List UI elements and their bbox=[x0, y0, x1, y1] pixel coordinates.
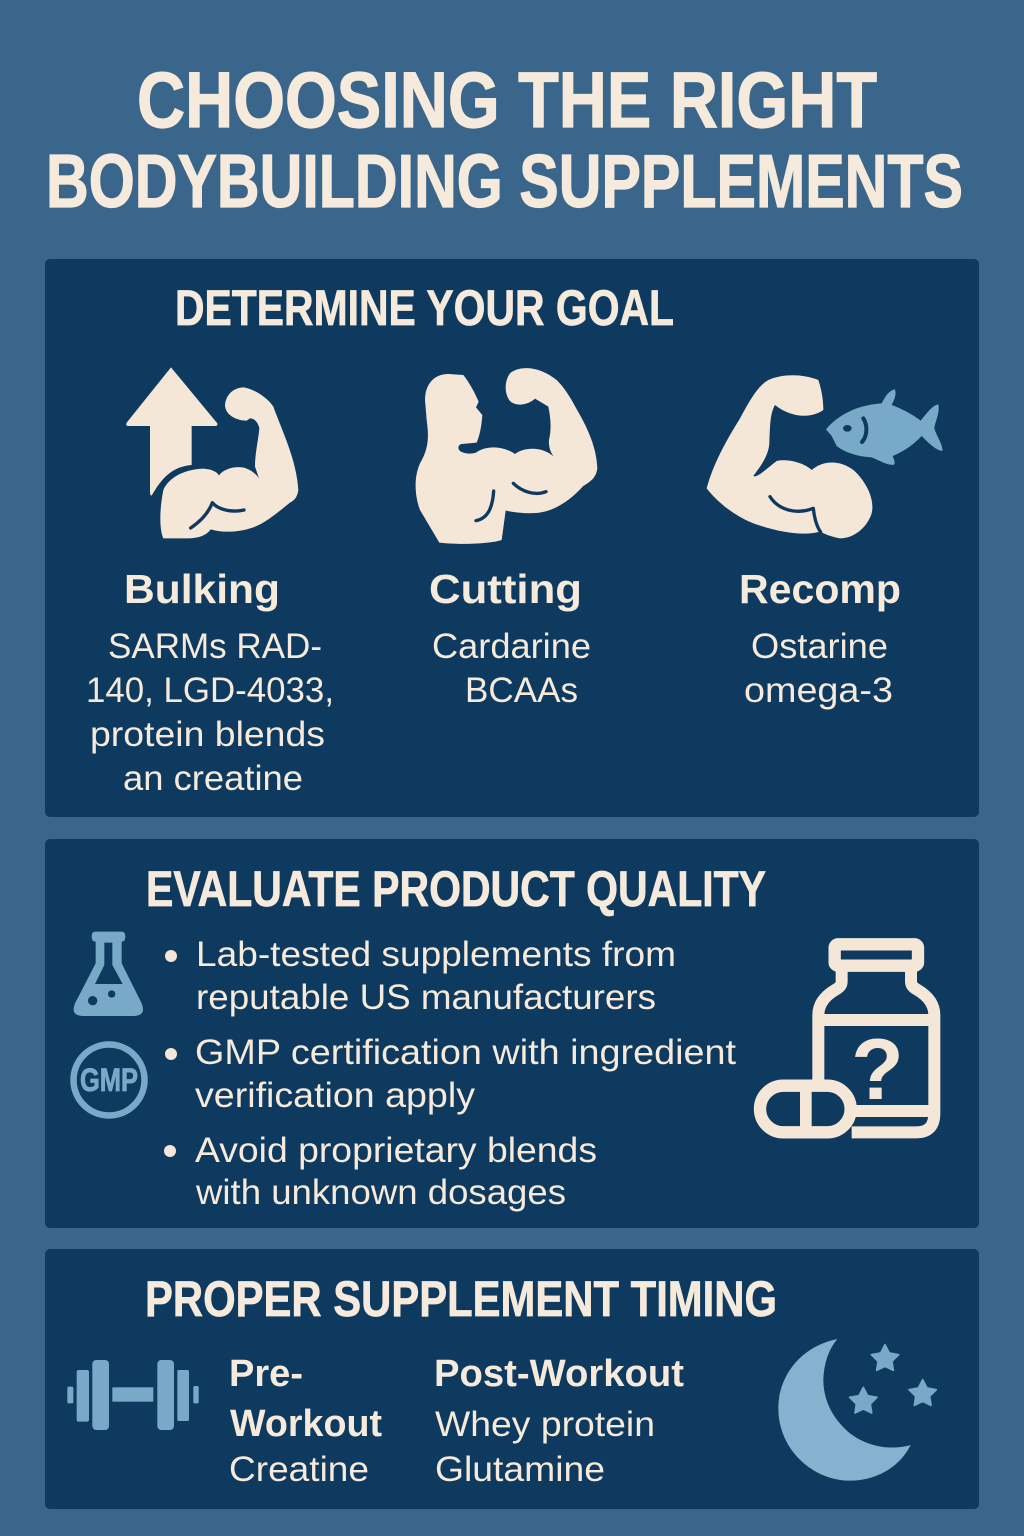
column: bulking: SARMs RAD- bbox=[108, 626, 322, 666]
column: pre-workout: Workout bbox=[230, 1403, 382, 1445]
column: post-workout: Whey protein bbox=[435, 1404, 655, 1444]
icon: dumbbell bbox=[67, 1360, 199, 1430]
bullet list: Lab-tested supplements from bbox=[196, 934, 676, 974]
bullet list: verification apply bbox=[195, 1075, 475, 1115]
column: bulking: an creatine bbox=[123, 758, 303, 798]
column: cutting bbox=[429, 566, 591, 710]
column: cutting: Cardarine bbox=[432, 626, 591, 666]
title: CHOOSING THE RIGHT bbox=[137, 55, 877, 144]
heading: evaluate product quality: EVALUATE PRODUCT QUALITY bbox=[146, 861, 766, 917]
icon: arrow up and flexed arm bbox=[126, 367, 298, 538]
icon: supplement bottle and pill: ? bbox=[851, 1022, 904, 1118]
bullet list: with unknown dosages bbox=[195, 1172, 566, 1212]
heading: determine your goal: DETERMINE YOUR GOAL bbox=[175, 280, 674, 336]
column: recomp: Recomp bbox=[739, 566, 901, 612]
title bbox=[46, 55, 963, 223]
column: recomp: Ostarine bbox=[751, 626, 888, 666]
panel: evaluate product quality bbox=[45, 839, 979, 1228]
heading: proper supplement timing: PROPER SUPPLEMENT TIMING bbox=[145, 1271, 777, 1327]
icon: supplement bottle and pill bbox=[760, 944, 934, 1132]
panel: determine your goal bbox=[45, 259, 979, 817]
column: bulking bbox=[86, 566, 334, 798]
column: recomp: omega-3 bbox=[744, 670, 893, 710]
column: pre-workout: Creatine bbox=[229, 1449, 369, 1489]
column: cutting: BCAAs bbox=[465, 670, 578, 710]
bullet list: reputable US manufacturers bbox=[196, 977, 656, 1017]
column: bulking: Bulking bbox=[124, 566, 280, 612]
column: cutting: Cutting bbox=[429, 566, 582, 612]
bullet list: Avoid proprietary blends bbox=[195, 1130, 597, 1170]
panel: proper supplement timing bbox=[45, 1249, 979, 1509]
icon: arm with fish bbox=[707, 375, 942, 538]
column: bulking: protein blends bbox=[90, 714, 325, 754]
icon: flexing torso bbox=[416, 368, 597, 544]
icon: lab flask bbox=[74, 932, 143, 1016]
column: post-workout bbox=[434, 1353, 684, 1489]
bullet list: GMP certification with ingredient bbox=[195, 1032, 736, 1072]
icon: moon and stars bbox=[778, 1339, 936, 1481]
icon: GMP badge: GMP bbox=[80, 1062, 138, 1098]
icon: GMP badge bbox=[74, 1044, 144, 1116]
column: post-workout: Glutamine bbox=[435, 1449, 605, 1489]
column: recomp bbox=[739, 566, 901, 710]
bullet list bbox=[164, 934, 736, 1212]
column: pre-workout bbox=[229, 1353, 382, 1489]
column: pre-workout: Pre- bbox=[229, 1353, 303, 1395]
column: post-workout: Post-Workout bbox=[434, 1353, 684, 1395]
column: bulking: 140, LGD-4033, bbox=[86, 670, 334, 710]
